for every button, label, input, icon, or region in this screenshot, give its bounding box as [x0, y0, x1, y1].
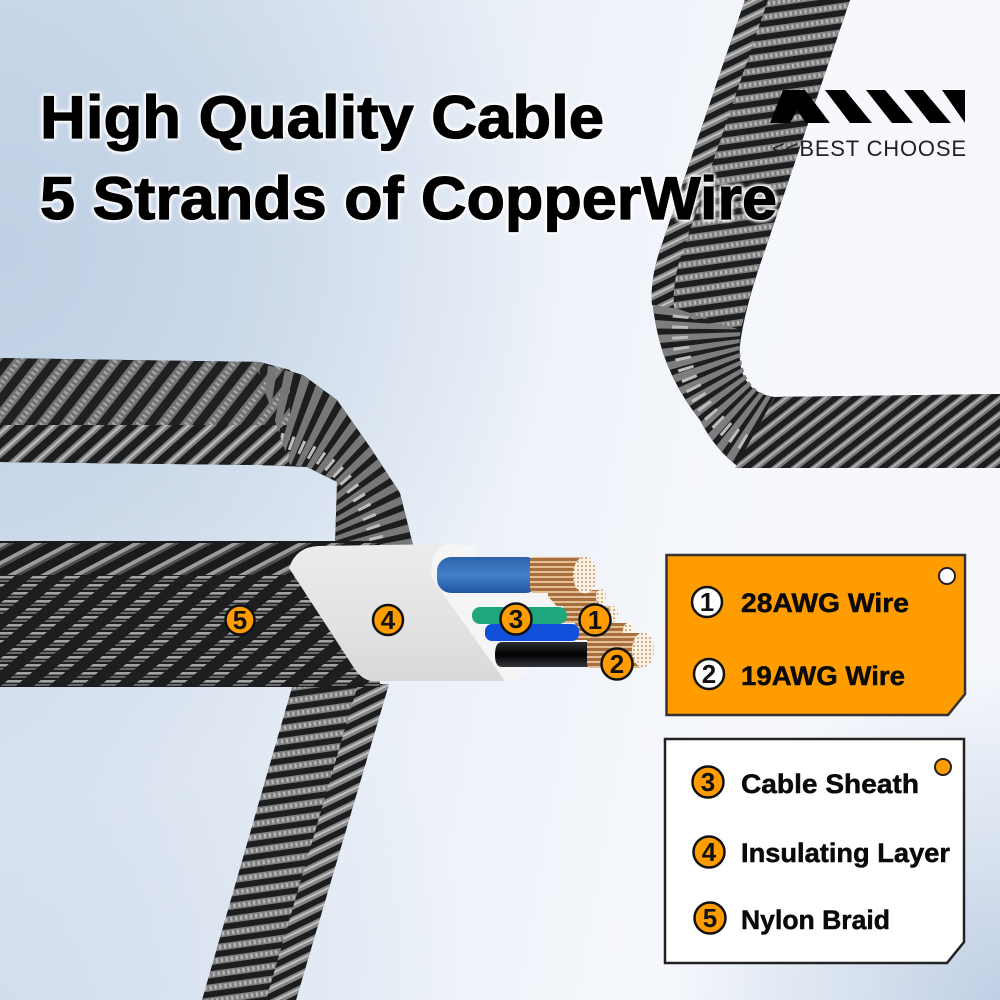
- callout number 5: 5: [233, 605, 247, 635]
- panel: wire gauges: [666, 555, 965, 715]
- cable: upper right run: [652, 0, 1000, 468]
- legend item: 19AWG wire: 19AWG Wire: [741, 661, 905, 691]
- legend item: nylon braid: [694, 902, 890, 935]
- legend item: nylon braid: 5: [703, 903, 717, 933]
- logo: best choose: <<BEST CHOOSE: [772, 136, 966, 161]
- insulating layer: white jacket: [289, 544, 562, 681]
- legend item: nylon braid: Nylon Braid: [741, 905, 890, 935]
- panel: cable layers: [665, 739, 964, 963]
- legend item: 28AWG wire: 28AWG Wire: [741, 588, 909, 618]
- wire: bright blue core: [485, 624, 579, 641]
- wire: blue conductor: [437, 556, 597, 594]
- legend item: insulating layer: 4: [702, 837, 717, 867]
- legend item: cable sheath: 3: [701, 767, 715, 797]
- legend item: 28AWG wire: 1: [700, 587, 714, 617]
- legend item: 19AWG wire: 2: [702, 659, 716, 689]
- callout number 4: [373, 605, 403, 635]
- callout number 3: [500, 604, 532, 634]
- panel dot: [939, 568, 955, 584]
- cable end: copper conductors: [548, 589, 633, 640]
- cable: lower diagonal run: [202, 684, 389, 1000]
- panel dot: [935, 759, 951, 775]
- jacket cut face: [431, 544, 562, 681]
- legend item: insulating layer: Insulating Layer: [741, 838, 950, 868]
- callout number 2: 2: [610, 649, 624, 679]
- legend item: cable sheath: Cable Sheath: [741, 769, 919, 799]
- callout number 1: 1: [588, 605, 602, 635]
- cable: front horizontal run with nylon braid: [0, 541, 380, 687]
- callout number 3: 3: [509, 604, 523, 634]
- callout number 1: [580, 604, 610, 636]
- legend item: cable sheath: [692, 766, 919, 799]
- wire: black conductor: [495, 632, 654, 668]
- title: [40, 84, 777, 232]
- cable: left top run and corner: [0, 358, 413, 545]
- callout number 2: [602, 648, 632, 680]
- logo: best choose: [770, 90, 966, 161]
- title: High Quality Cable: [40, 84, 604, 151]
- title: 5 Strands of CopperWire: [40, 165, 777, 232]
- wire: green core: [472, 607, 567, 624]
- callout number 5: [226, 605, 254, 635]
- callout number 4: 4: [381, 605, 396, 635]
